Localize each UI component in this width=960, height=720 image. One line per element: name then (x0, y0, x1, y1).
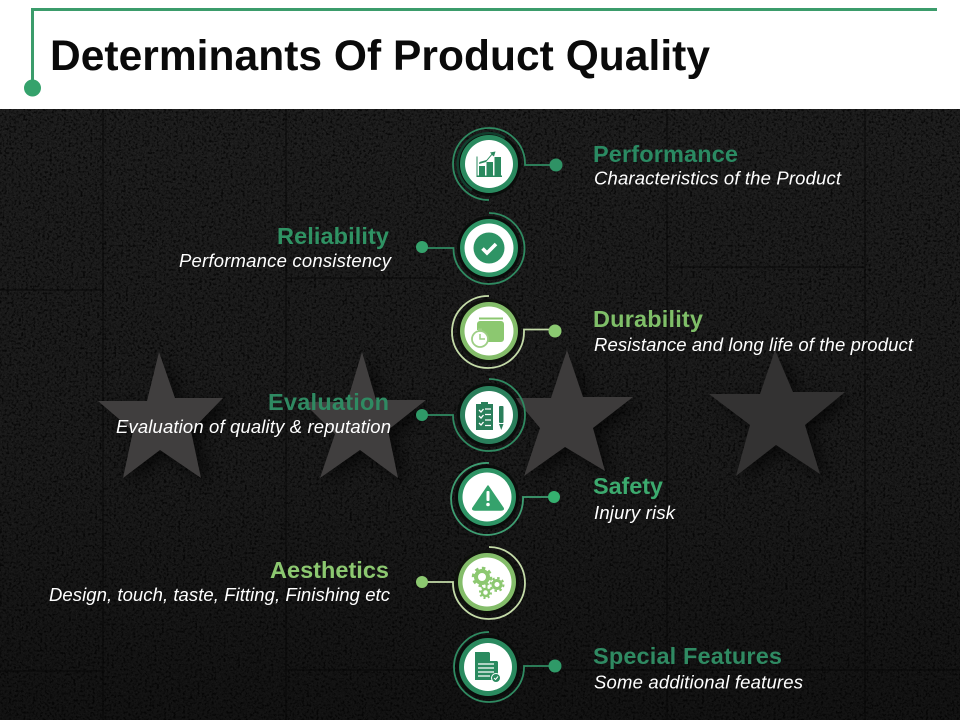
icon: check badge (474, 232, 504, 264)
connector and ring arc (451, 463, 554, 535)
decorative stars (98, 350, 852, 483)
heading: Reliability: Reliability (277, 223, 389, 249)
star 1 (98, 352, 230, 483)
step: Aesthetics (49, 547, 525, 619)
node circle (455, 465, 519, 529)
description: Performance consistency (179, 250, 393, 271)
heading: Aesthetics: Aesthetics (270, 557, 389, 583)
header accent line (32, 10, 937, 88)
connector dot (550, 158, 562, 172)
connector and ring arc (422, 379, 525, 451)
description: Characteristics of the Product (594, 168, 842, 188)
connector dot (548, 660, 562, 672)
icon: bar chart (476, 152, 502, 177)
heading: Safety: Safety (593, 473, 663, 499)
connector dot (548, 491, 560, 503)
header accent dot (24, 80, 41, 96)
description: Injury risk (594, 502, 677, 523)
header band (0, 0, 960, 109)
heading: Special Features: Special Features (593, 643, 782, 669)
connector and ring arc (454, 632, 555, 702)
star 3 (515, 350, 640, 481)
connector and ring arc (453, 128, 556, 200)
star 2 (303, 352, 433, 483)
description: Resistance and long life of the product (594, 334, 914, 355)
heading: Performance: Performance (593, 141, 738, 167)
icon: document with check (475, 652, 500, 682)
node circle (457, 383, 521, 447)
step: Safety (451, 463, 677, 535)
step: Special Features (454, 632, 803, 702)
connector and ring arc (422, 213, 524, 284)
node circle (457, 299, 521, 363)
heading: Evaluation: Evaluation (268, 389, 389, 415)
connector and ring arc (422, 547, 525, 619)
connector dot (548, 324, 562, 338)
step: Reliability (179, 213, 524, 284)
node circle (455, 550, 519, 614)
icon: box with stopwatch (472, 318, 504, 347)
connector dot (416, 241, 428, 253)
connector dot (416, 576, 428, 588)
description: Design, touch, taste, Fitting, Finishing etc (49, 584, 391, 605)
icon: gears (473, 568, 504, 598)
icon: checklist clipboard (476, 402, 504, 430)
step: Evaluation (116, 379, 525, 451)
node circle (457, 132, 521, 196)
description: Some additional features (594, 672, 803, 692)
connector dot (416, 409, 428, 421)
step: Durability (452, 296, 914, 368)
icon: warning triangle (473, 486, 503, 510)
star 4 (709, 350, 852, 481)
title: Determinants Of Product Quality (50, 33, 710, 80)
node circle (457, 216, 521, 280)
node circle (456, 635, 520, 699)
description: Evaluation of quality & reputation (116, 416, 391, 437)
connector and ring arc (452, 296, 555, 368)
step: Performance (453, 128, 842, 200)
heading: Durability: Durability (593, 306, 703, 332)
